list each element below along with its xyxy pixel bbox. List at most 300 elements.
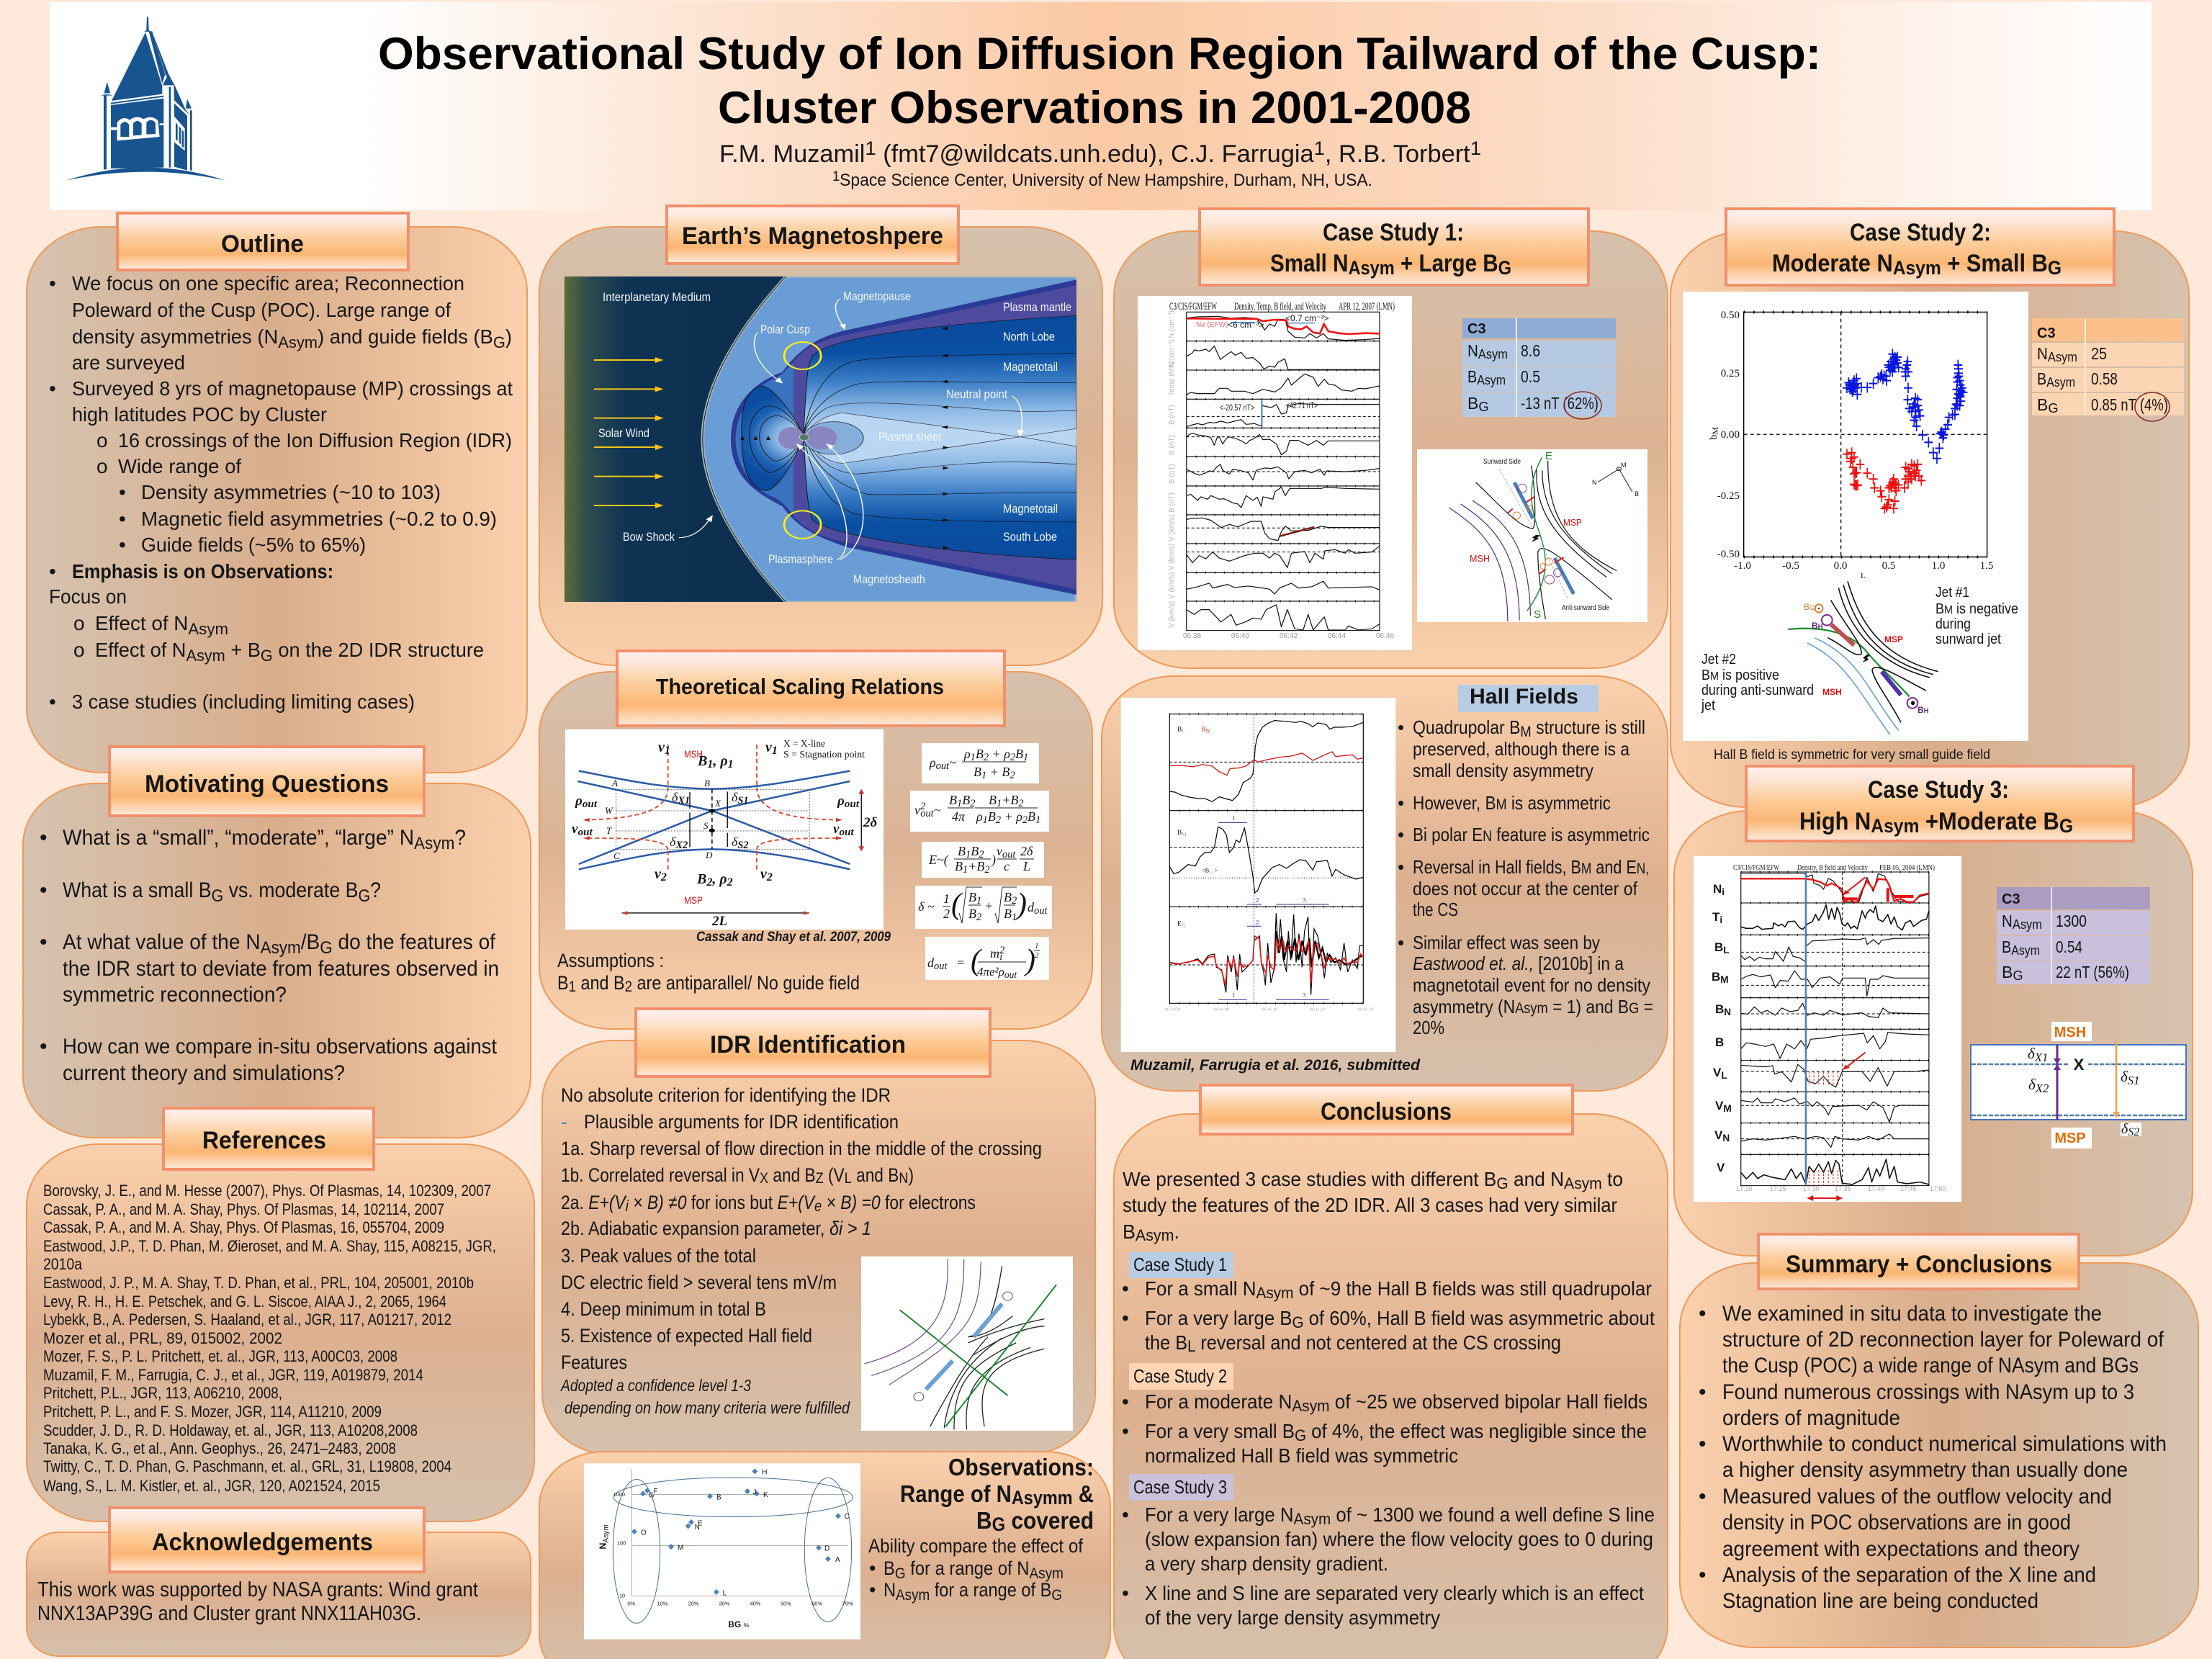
text block: case study 1 conclusions	[1122, 1252, 1655, 1355]
text block: IDR criteria: and B	[852, 1164, 899, 1186]
panel: acknowledgements	[27, 1508, 531, 1656]
diagram: X-line and S-line separation: MSP	[2054, 1130, 2086, 1146]
diagram: X-line schematic	[861, 1256, 1073, 1431]
authors: 1	[1314, 137, 1325, 159]
text block: observations notes: for a range of N	[906, 1557, 1029, 1579]
heading: case study 3: Asym	[1871, 814, 1919, 837]
text block: questions: •	[40, 826, 48, 850]
table: case 3 parameters: G	[2013, 968, 2023, 983]
case 3 chart labels: Density, B field and Velocity	[1797, 863, 1868, 872]
text block: questions: ?	[454, 826, 466, 850]
case 2 jet labels: BM is positive	[1701, 667, 1779, 683]
heading: outline	[117, 213, 408, 270]
formula: layer thickness	[915, 886, 1052, 929]
schematic labels: N	[1592, 479, 1597, 486]
text block: reference list: Cassak, P. A., and M. A. Shay, Phys. Of Plasmas, 14, 102114, 2007	[43, 1200, 444, 1218]
magnetosphere labels: Magnetopause	[843, 289, 911, 303]
chart: Hall field time series: G	[1209, 871, 1213, 876]
text block: outline bullets: ) and guide fields (B	[318, 325, 493, 348]
case 2 jet labels	[1701, 585, 2018, 715]
geometry labels: out	[577, 826, 593, 838]
table: case 2 parameters: B	[2037, 369, 2048, 388]
text block: IDR criteria	[559, 1084, 1042, 1417]
diagram: X-line and S-line separation	[1971, 1022, 2186, 1148]
formula: electric field: 1	[966, 849, 971, 860]
case 3 chart labels: B	[1714, 940, 1723, 954]
schematic labels: B	[1635, 490, 1639, 498]
formula: outflow velocity: 2	[1022, 814, 1028, 826]
panel: theoretical scaling relations	[539, 651, 1092, 1029]
heading: case study 1: + Large B	[1395, 250, 1498, 277]
scatter chart: NAsym vs BG: G	[649, 1491, 655, 1499]
text block: summary bullets: orders of magnitude	[1722, 1406, 1900, 1430]
text block: Hall field bullets	[1398, 716, 1653, 1038]
text block: Hall field bullets: small density asymmetry	[1413, 760, 1593, 781]
case 1 y-axis labels: V (km/s)	[1168, 601, 1176, 628]
table: case 3 parameters: C3	[2002, 891, 2020, 907]
text block: IDR criteria: No absolute criterion for identifying the IDR	[561, 1084, 891, 1106]
formula: outflow velocity: B	[1028, 809, 1035, 824]
case 1 chart labels: 06:46	[1376, 632, 1394, 640]
formula: layer thickness: (	[951, 888, 963, 921]
panel: observations chart	[539, 1452, 1110, 1659]
text block: reference list: Cassak, P. A., and M. A. Shay, Phys. Of Plasmas, 16, 055704, 2009	[43, 1218, 444, 1236]
text block: summary bullets: •	[1699, 1563, 1707, 1587]
chart: Hall field time series: <B	[1202, 867, 1209, 874]
text block: reference list: Pritchett, P.L., JGR, 113, A06210, 2008,	[43, 1384, 282, 1402]
text block: summary bullets: •	[1699, 1380, 1707, 1404]
text block: reference list: Levy, R. H., H. E. Petschek, and G. L. Siscoe, AIAA J., 2, 2065, 1964	[43, 1292, 446, 1310]
formula: ion skin depth: m	[990, 946, 999, 961]
text block: case study 1 conclusions: Case Study 1	[1133, 1254, 1227, 1275]
heading: theoretical scaling relations	[617, 651, 1004, 726]
heading: case study 2: + Small B	[1941, 250, 2048, 277]
scatter chart: NAsym vs BG: J	[753, 1489, 757, 1497]
text block: questions: the IDR start to deviate from features observed in	[63, 957, 499, 981]
text block: outline bullets: o	[96, 455, 108, 477]
geometry labels: A	[611, 778, 618, 788]
chart: Hall field time series: 2	[1256, 896, 1259, 904]
text block: case study 2 conclusions: •	[1122, 1390, 1129, 1413]
text block: observations notes: G	[1051, 1586, 1062, 1604]
text block: reference list: Wang, S., L. M. Kistler, et. al., JGR, 120, A021524, 2015	[43, 1477, 380, 1495]
geometry labels: W	[605, 805, 613, 816]
text block: reference list: 2010a	[43, 1255, 83, 1273]
case 1 chart labels: 06:42	[1280, 632, 1298, 640]
text block: case study 1 conclusions: For a small N	[1145, 1277, 1264, 1300]
case 1 y-axis labels: B (nT)	[1168, 435, 1176, 455]
text block: Hall field bullets: Bi polar EN feature is asymmetric	[1413, 824, 1650, 845]
text block: case study 2 conclusions: G	[1295, 1426, 1306, 1444]
text block: outline bullets: •	[49, 377, 56, 400]
geometry labels: δ	[670, 835, 675, 849]
table: case 2 parameters: 0.58	[2091, 369, 2118, 388]
formula: layer thickness: +	[984, 899, 993, 913]
heading: observations range: &	[1073, 1480, 1094, 1507]
geometry labels: out	[845, 798, 860, 810]
text block: Hall field bullets: Similar effect was seen by	[1413, 932, 1600, 953]
diagram: X-line and S-line separation: S1	[2128, 1074, 2140, 1087]
case 3 chart labels: V	[1713, 1066, 1721, 1079]
geometry labels: 1	[772, 745, 778, 757]
text block: observations notes	[868, 1535, 1083, 1604]
case 3 chart labels: C3/CIS/FGM/EFW	[1733, 863, 1779, 872]
text block: IDR criteria: and B	[768, 1164, 816, 1186]
formula: outflow velocity: + ρ	[1001, 809, 1022, 824]
geometry labels: 1	[728, 758, 734, 770]
schematic labels: M	[1621, 462, 1626, 469]
case 2 axis labels: L	[1861, 572, 1866, 580]
formula: outflow velocity: 4π	[952, 809, 966, 824]
text block: outline bullets: Wide range of	[118, 455, 241, 477]
text block: Hall field bullets: However, BM is asymmetric	[1413, 792, 1611, 814]
heading: motivating questions	[109, 747, 424, 816]
text block: IDR criteria: 1a. Sharp reversal of flow direction in the middle of the crossing	[561, 1138, 1042, 1159]
scatter chart: NAsym vs BG: E	[698, 1519, 703, 1527]
scatter chart: NAsym vs BG: H	[762, 1468, 768, 1476]
text block: IDR criteria: )	[908, 1164, 914, 1186]
case 1 chart labels: APR 12, 2007 (LMN)	[1339, 301, 1395, 313]
formula: layer thickness: δ ~	[918, 899, 935, 914]
geometry labels: B	[704, 778, 710, 788]
authors: F.M. Muzamil	[719, 140, 863, 168]
table: case 1 parameters: Asym	[1478, 346, 1508, 361]
formula: layer thickness: 2	[976, 912, 981, 923]
text block: assumptions: B	[557, 972, 570, 994]
text block: conclusions intro	[1123, 1168, 1623, 1244]
text block: Hall field bullets: •	[1398, 824, 1404, 845]
heading: case study 3: High N	[1799, 808, 1879, 835]
chart: Hall field time series: >	[1213, 867, 1218, 874]
magnetosphere labels: Polar Cusp	[760, 323, 810, 336]
text block: outline bullets: o	[73, 639, 85, 661]
affiliation: 1	[832, 169, 840, 184]
text block: Hall field bullets: •	[1398, 932, 1404, 953]
text block: case study 1 conclusions: G	[1292, 1313, 1303, 1331]
scatter chart: NAsym vs BG: B	[716, 1494, 721, 1502]
geometry labels: S2	[737, 840, 749, 851]
text block: case study 1 conclusions: L	[1187, 1337, 1195, 1355]
geometry labels: δ	[732, 835, 737, 849]
table: case 2 parameters: Asym	[2046, 374, 2075, 390]
heading: case study 2: G	[2048, 256, 2062, 279]
text block: Hall field bullets: does not occur at the center of	[1413, 878, 1638, 899]
heading: case study 2: Moderate N	[1772, 250, 1905, 277]
geometry labels: D	[705, 850, 713, 860]
formula: electric field: c	[1004, 859, 1010, 873]
heading: case study 3	[1746, 766, 2134, 841]
table: case 3 parameters: 1300	[2056, 912, 2087, 930]
heading: case study 1	[1200, 209, 1588, 285]
case 2 axis labels: M	[1710, 426, 1720, 435]
table: case 1 parameters: G	[1478, 399, 1489, 414]
heading: case study 3: +Moderate B	[1919, 808, 2059, 835]
diagram: X-line and S-line separation: MSH	[2054, 1025, 2086, 1040]
formula: outflow velocity: 1	[1035, 814, 1040, 826]
case 2 jet labels: BM is negative	[1936, 601, 2018, 617]
case 2 axis labels: 1.0	[1932, 560, 1945, 572]
text block: IDR criteria: depending on how many criteria were fulfilled	[565, 1398, 850, 1417]
text block: questions: •	[40, 930, 48, 954]
geometry labels: 1	[665, 745, 670, 757]
text block: IDR criteria: 5. Existence of expected Hall field	[561, 1325, 812, 1346]
text block: case study 3 conclusions: a very sharp density gradient.	[1145, 1552, 1388, 1575]
scatter chart: NAsym vs BG: N	[695, 1524, 700, 1532]
text block: questions: What is a “small”, “moderate”, “large” N	[63, 826, 437, 850]
text block: IDR criteria: Z	[816, 1169, 824, 1187]
text block: outline bullets: Surveyed 8 yrs of magnetopause (MP) crossings at	[72, 377, 513, 400]
case 2 axis labels: -0.25	[1717, 490, 1740, 502]
formula: outflow velocity: 2	[1018, 798, 1024, 809]
text block: observations notes: Ability compare the effect of	[868, 1535, 1083, 1557]
heading: observations range: Range of N	[900, 1480, 1025, 1507]
text block: outline bullets: Focus on	[49, 585, 127, 608]
text block: case study 1 conclusions: the B	[1145, 1331, 1192, 1354]
scatter chart: NAsym vs BG: N	[598, 1543, 608, 1550]
geometry labels: X	[714, 798, 721, 809]
case 3 chart labels: B	[1715, 1002, 1724, 1016]
text block: observations notes: •	[869, 1579, 876, 1601]
chart: Hall field time series: E	[1177, 921, 1182, 928]
geometry labels: v	[765, 739, 772, 755]
heading: summary and conclusions: Summary + Conclusions	[1786, 1251, 2052, 1278]
text block: case study 2 conclusions: Case Study 2	[1133, 1365, 1227, 1387]
panel: earth's magnetosphere	[539, 206, 1102, 665]
formula: electric field: L	[1022, 859, 1030, 873]
chart: Hall field time series: 06:41:10	[1262, 1007, 1277, 1012]
case 1 chart labels: <0.7 cm⁻³>	[1285, 313, 1328, 323]
text block: observations notes: Asym	[896, 1586, 930, 1604]
scatter chart: NAsym vs BG: C	[845, 1513, 850, 1521]
geometry labels: S = Stagnation point	[783, 750, 865, 760]
panel: IDR identification	[542, 1009, 1095, 1455]
header banner	[50, 2, 2152, 210]
text block: Hall field bullets: the CS	[1413, 899, 1458, 920]
chart: Hall field time series: L	[1182, 728, 1185, 734]
heading: case study 3: Case Study 3:	[1868, 776, 2009, 804]
formula: ion skin depth: 4πe²ρ	[977, 965, 1004, 979]
formula: electric field	[922, 842, 1044, 878]
case 1 chart labels: <-20.57 nT>	[1220, 403, 1254, 413]
table: case 3 parameters: B	[2002, 963, 2013, 981]
text block: IDR criteria: X	[760, 1169, 768, 1187]
text block: questions: At what value of the N	[63, 930, 274, 954]
formula: electric field: B	[955, 859, 963, 873]
text block: IDR criteria: N	[899, 1169, 908, 1187]
chart: Hall field time series: 06:41:00	[1214, 1007, 1229, 1012]
heading: outline: Outline	[221, 230, 304, 258]
panel: conclusions	[1114, 1085, 1668, 1659]
geometry labels: v	[655, 866, 661, 882]
case 3 chart labels: L	[1721, 1070, 1727, 1081]
text block: reference list: Mozer, F. S., P. L. Pritchett, et. al., JGR, 113, A00C03, 2008	[43, 1347, 397, 1365]
chart: Hall field time series: 1	[1232, 991, 1236, 998]
formula: ion skin depth: out	[934, 961, 948, 972]
geometry labels: MSP	[684, 894, 703, 906]
formula: outflow velocity: +B	[1002, 793, 1018, 807]
text block: reference list: Twitty, C., T. D. Phan, G. Paschmann, et. al., GRL, 31, L19808, 2004	[43, 1457, 451, 1475]
formula: electric field: B	[958, 844, 966, 858]
case 2 jet labels: BH	[1917, 705, 1929, 715]
text block: Hall field bullets: Eastwood et. al., [2010b] in a	[1413, 953, 1624, 974]
text block: case study 2 conclusions: normalized Hall B field was symmetric	[1145, 1444, 1458, 1467]
scatter chart: NAsym vs BG: 100	[617, 1540, 626, 1547]
table: case 3 parameters: 0.54	[2056, 938, 2082, 956]
schematic labels: MSH	[1470, 553, 1490, 564]
scatter chart: NAsym vs BG: A	[835, 1556, 840, 1564]
table: case 1 parameters: Asym	[1477, 372, 1506, 387]
text block: questions: current theory and simulations?	[63, 1061, 345, 1085]
geometry labels: v	[658, 739, 665, 755]
heading: earth's magnetosphere	[667, 206, 958, 264]
case 1 y-axis labels: B (nT)	[1168, 464, 1176, 484]
geometry labels: δ	[672, 790, 678, 804]
text block: outline bullets: Effect of N	[95, 612, 189, 634]
text block: case study 3 conclusions: (slow expansion fan) where the flow velocity goes to 0 during	[1145, 1528, 1653, 1550]
heading: case study 1: G	[1498, 256, 1511, 279]
text block: outline bullets: o	[96, 429, 108, 451]
heading: case study 2	[1726, 209, 2114, 285]
text block: questions: What is a small B	[63, 878, 230, 902]
heading: earth's magnetosphere: Earth’s Magnetoshpere	[682, 222, 943, 250]
text block: summary bullets: •	[1699, 1432, 1707, 1456]
affiliation: Space Science Center, University of New Hampshire, Durham, NH, USA.	[840, 171, 1372, 190]
case 2 jet labels: MSP	[1884, 634, 1903, 644]
text block: reference list: Eastwood, J.P., T. D. Phan, M. Øieroset, and M. A. Shay, 115, A08215, JGR,	[43, 1237, 496, 1255]
heading: acknowledgements: Acknowledgements	[152, 1529, 373, 1556]
scatter chart: NAsym vs BG: 60%	[811, 1600, 822, 1606]
schematic labels: Anti-sunward Side	[1562, 604, 1609, 612]
text block: observations notes: Asym	[1029, 1564, 1064, 1582]
case 3 chart labels: L	[1723, 945, 1730, 956]
heading: case study 1: Small N	[1270, 250, 1360, 277]
formula: layer thickness: B	[1004, 907, 1012, 921]
case 2 axis labels: -0.5	[1782, 560, 1799, 572]
diagram: reconnection geometry	[565, 729, 884, 930]
text block: summary bullets: We examined in situ data to investigate the	[1722, 1302, 2102, 1326]
formula: layer thickness: B	[968, 907, 976, 921]
scatter chart: NAsym vs BG: 1000	[613, 1491, 625, 1498]
text block: reference list: Scudder, J. D., R. D. Holdaway, et. al., JGR, 113, A10208,2008	[43, 1421, 418, 1439]
formula: outflow density: 2	[1010, 770, 1015, 781]
text block: outline bullets: •	[49, 560, 56, 583]
diagram: X-line and S-line separation: δ	[2121, 1121, 2128, 1137]
geometry labels: , ρ	[711, 871, 727, 887]
text block: case study 3 conclusions: •	[1122, 1503, 1129, 1526]
text block: outline bullets: are surveyed	[72, 351, 185, 374]
chart: Hall field time series: B	[1202, 727, 1206, 734]
geometry labels: MSH	[684, 748, 703, 760]
case 1 chart labels: 06:40	[1231, 632, 1249, 640]
case 1 chart labels: <6 cm⁻³>	[1228, 320, 1264, 330]
table: case 3 parameters: Asym	[2011, 943, 2040, 958]
text block: Hall field bullets: •	[1398, 792, 1404, 814]
geometry labels: S	[703, 820, 709, 831]
text block: case study 1 conclusions: of 60%, Hall B field was asymmetric about	[1303, 1307, 1655, 1329]
text block: summary bullets: structure of 2D reconnection layer for Poleward of	[1722, 1328, 2164, 1352]
formula: ion skin depth: =	[956, 956, 965, 970]
geometry labels	[572, 739, 877, 929]
panel: case study 3	[1674, 766, 2193, 1256]
title: Cluster Observations in 2001-2008	[718, 83, 1471, 133]
text block: outline bullets: on the 2D IDR structure	[273, 639, 484, 661]
geometry labels: ρ	[575, 793, 583, 809]
case 3 chart labels: 17:45	[1900, 1185, 1917, 1192]
text block: IDR criteria: for electrons	[886, 1192, 993, 1213]
heading: conclusions: Conclusions	[1321, 1098, 1452, 1125]
case 3 chart labels: 17:30	[1803, 1185, 1820, 1192]
text block: outline bullets: density asymmetries (N	[72, 325, 283, 348]
table: case 1 parameters: -13 nT (62%)	[1521, 394, 1599, 413]
formula: ion skin depth	[925, 937, 1049, 980]
case 2 jet labels: BH	[1812, 621, 1823, 631]
text block: questions: vs. moderate B	[223, 878, 358, 902]
text block: outline bullets: o	[73, 612, 85, 634]
magnetosphere labels: Solar Wind	[598, 426, 649, 440]
table: case 1 parameters: 0.5	[1521, 367, 1540, 386]
formula: layer thickness: 1	[1012, 912, 1017, 923]
geometry labels: ρ	[837, 793, 845, 809]
scatter chart: NAsym vs BG: M	[678, 1545, 683, 1552]
case 1 chart labels: <42.71 nT>	[1286, 400, 1318, 410]
diagram: X-line and S-line separation: X	[2074, 1056, 2085, 1074]
case 2 jet labels: Jet #1	[1936, 585, 1969, 601]
heading: case study 2: Asym	[1893, 256, 1941, 279]
text block: outline bullets: )	[505, 325, 512, 348]
text block: case study 1 conclusions: reversal and not centered at the CS crossing	[1195, 1331, 1561, 1354]
text block: case study 1 conclusions: •	[1122, 1307, 1129, 1329]
panel: Hall fields	[1102, 676, 1668, 1091]
table: case 3 parameters: N	[2002, 912, 2014, 930]
text block: case study 2 conclusions: For a very small B	[1145, 1420, 1308, 1442]
text block: summary bullets: Worthwhile to conduct numerical simulations with	[1722, 1432, 2167, 1456]
text block: questions: ?	[370, 878, 381, 902]
case 2 axis labels: -1.0	[1734, 560, 1751, 572]
geometry labels: B	[697, 871, 706, 887]
heading: motivating questions: Motivating Questions	[145, 770, 389, 798]
panel: motivating questions	[23, 747, 531, 1138]
text block: case study 1 conclusions: For a very large B	[1145, 1307, 1305, 1329]
text block: outline bullets: high latitudes POC by Cluster	[72, 403, 327, 426]
chart: Hall field time series: N	[1182, 922, 1186, 929]
text block: case study 2 conclusions: For a moderate N	[1145, 1390, 1303, 1413]
panel: case study 2	[1671, 209, 2189, 807]
geometry labels: v	[572, 822, 577, 837]
case 1 y-axis labels: B (nT)	[1168, 405, 1176, 425]
formula: outflow density: 2	[984, 752, 989, 763]
formula: outflow velocity: B	[962, 793, 970, 807]
case 1 chart labels: 06:44	[1328, 632, 1346, 640]
panel: summary and conclusions	[1680, 1234, 2198, 1647]
text block: questions: /B	[301, 930, 320, 954]
formula: outflow velocity	[910, 791, 1049, 832]
geometry labels: S1	[737, 795, 749, 806]
text block: questions: G	[358, 886, 370, 906]
formula: outflow velocity: 1	[957, 798, 962, 809]
diagram: X-line and S-line separation: δ	[2028, 1045, 2035, 1062]
text block: IDR criteria: L	[845, 1169, 852, 1187]
authors: 1	[1470, 137, 1481, 159]
case 3 chart labels: B	[1712, 970, 1720, 984]
formula: layer thickness: B	[1004, 890, 1012, 904]
icon: university tower logo	[66, 17, 225, 181]
text block: assumptions: Assumptions :	[557, 950, 664, 971]
text block: reference list: Muzamil, F. M., Farrugia, C. J., et al., JGR, 119, A019879, 2014	[43, 1366, 423, 1384]
geometry labels: 2	[727, 876, 733, 889]
formula: electric field: 2	[979, 849, 984, 860]
formula: outflow density: ρ	[930, 755, 936, 770]
schematic: case 1 reconnection geometry	[1417, 449, 1647, 622]
